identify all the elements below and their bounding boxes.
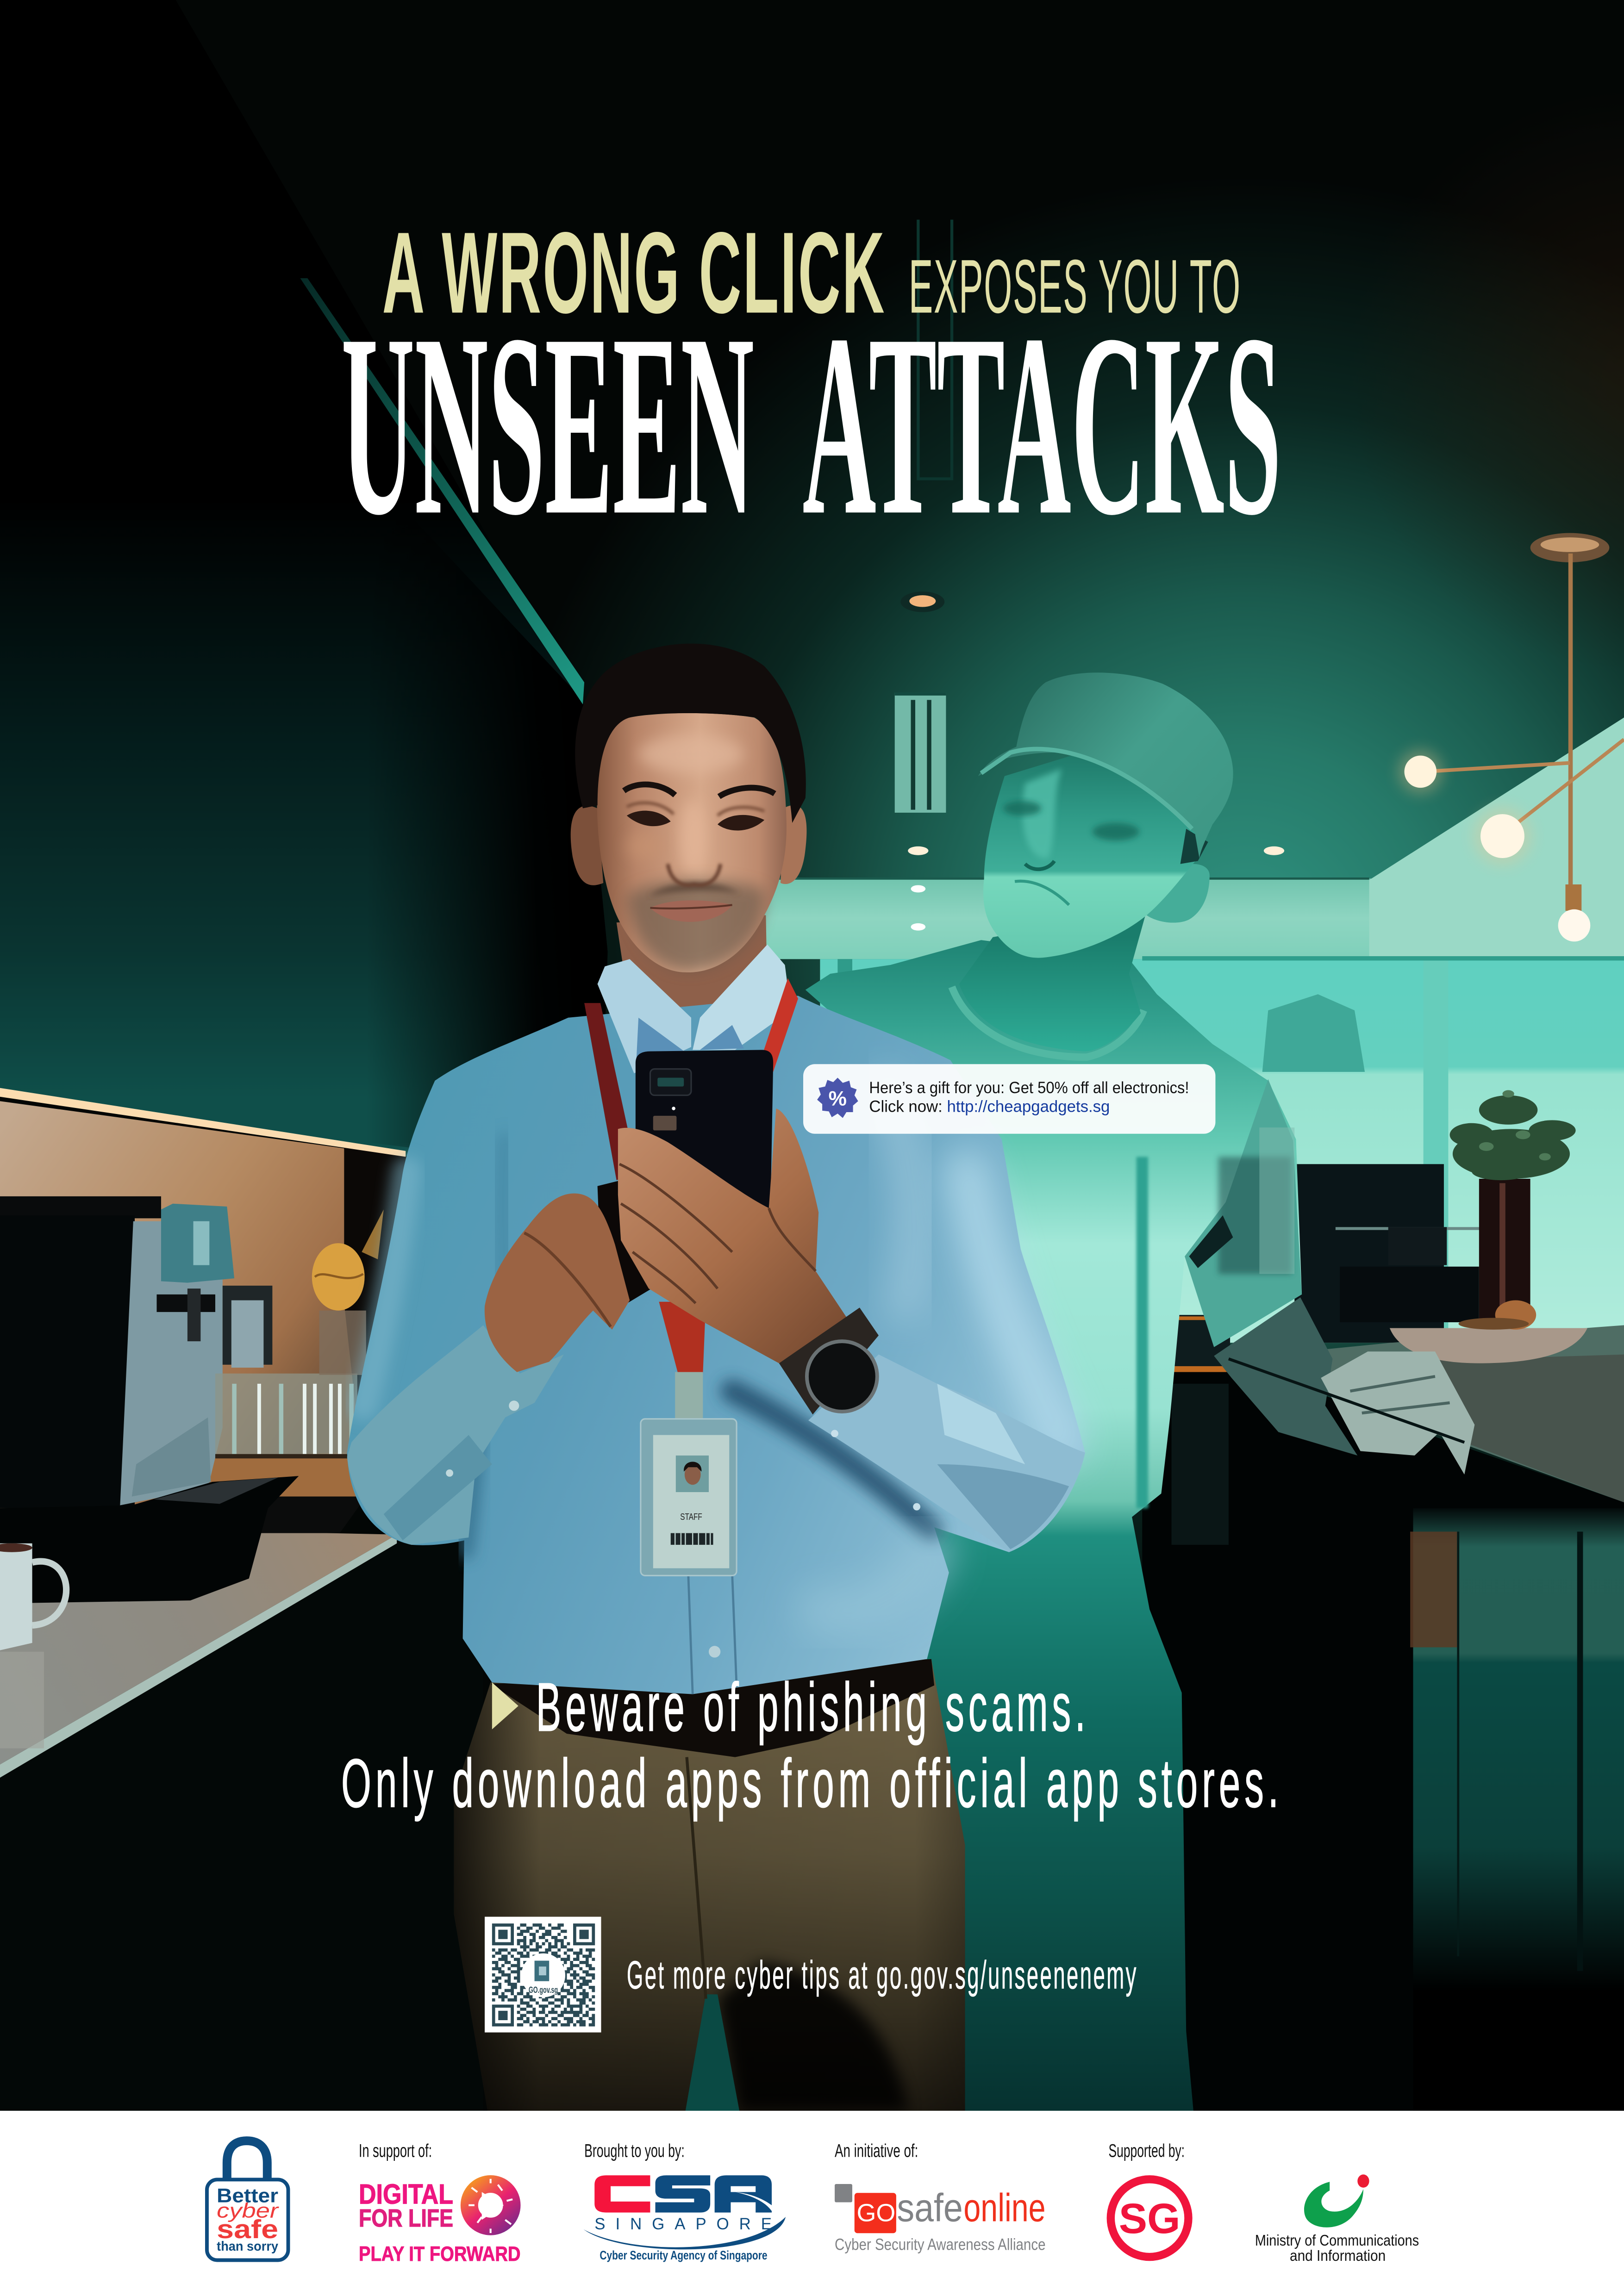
logo: CSA Singapore: Cyber Security Agency of Singapore [600, 2248, 768, 2262]
scene: lit ceiling band [754, 717, 1624, 959]
left hand finger [524, 1233, 611, 1326]
ghost face [983, 754, 1198, 958]
placket and buttons [688, 1574, 737, 1694]
decorative: LED strip under cabinet [0, 1088, 406, 1157]
message line 1: Beware of phishing scams. [536, 1668, 1089, 1746]
badge barcode [671, 1533, 713, 1545]
logo: SG circle: SG [1119, 2195, 1181, 2242]
icon: yellow fruit [312, 1209, 384, 1311]
notification text: Here’s a gift for you: Get 50% off all electronics! [869, 1078, 1189, 1097]
logo: go safe online: Cyber Security Awareness Alliance [835, 2236, 1046, 2253]
logo: ministry swirl [1304, 2174, 1369, 2228]
scene: warm glow top right [1318, 88, 1624, 673]
ministry text [1255, 2232, 1419, 2265]
face highlights [627, 735, 744, 876]
right hand [618, 1108, 851, 1363]
shirt folds and sleeve shading [363, 1091, 1062, 1612]
left sleeve cuff and forearm [347, 1325, 564, 1545]
icon: white mug [0, 1543, 66, 1650]
see-through machine in sleeve [1189, 1127, 1294, 1274]
eye socket shadow [627, 803, 764, 815]
scene: kitchen backsplash [0, 1101, 406, 1611]
moustache [649, 883, 739, 896]
logo: go safe online [835, 2184, 1046, 2253]
wristwatch [779, 1307, 879, 1414]
logo: digital for life [359, 2179, 521, 2265]
scene: black counter base [1142, 1359, 1624, 2116]
scene: back counter with orange edge [1142, 1315, 1230, 1545]
hands dark shadow [598, 1179, 652, 1306]
eyebrows [624, 784, 775, 796]
scene: left base cabinets [0, 1523, 483, 2116]
QR logo [521, 1954, 565, 1997]
ghost cap [978, 672, 1233, 858]
shadow on right leg [718, 1962, 908, 2111]
ghost ear [1147, 864, 1210, 923]
notification link line: Click now: http://cheapgadgets.sg [869, 1098, 1110, 1115]
icon: arrow marker [492, 1682, 518, 1730]
badge photo [676, 1456, 709, 1492]
neck [617, 915, 768, 1062]
icon: percent badge [817, 1078, 858, 1118]
eyes [627, 811, 764, 831]
logo: better cyber safe padlock [207, 2141, 288, 2260]
QR logo: GO.gov.sg [529, 1985, 558, 1995]
decorative: faint vertical ceiling recess [918, 220, 952, 479]
logo: SG circle [1111, 2179, 1188, 2257]
ghost neck [959, 911, 1147, 1052]
scene: wood shelf reflection [205, 1453, 363, 1497]
left ear [571, 806, 603, 885]
shirt [347, 996, 1085, 1694]
face [597, 713, 787, 972]
ghost collar [952, 987, 1143, 1057]
notification card [803, 1064, 1215, 1134]
hair [575, 644, 806, 823]
more tips text: Get more cyber tips at go.gov.sg/unseenenemy [627, 1954, 1138, 1997]
decorative: diagonal ceiling light strip [300, 278, 584, 704]
right hand fingers [619, 1164, 816, 1303]
counter edge through ghost arm [1229, 1359, 1464, 1442]
ghost hand [1321, 1351, 1474, 1475]
logo: better cyber safe padlock: cyber [217, 2200, 280, 2222]
icon: bowl of bread [1390, 1300, 1587, 1363]
logo: go safe online: safe [897, 2186, 963, 2230]
logo: CSA Singapore [584, 2175, 786, 2262]
logo: better cyber safe padlock: safe [217, 2215, 278, 2244]
nose shadow [668, 864, 720, 885]
footer panel [0, 2111, 1624, 2296]
logo: CSA Singapore: SINGAPORE [594, 2215, 772, 2233]
label: brought to you by: Brought to you by: [584, 2140, 685, 2161]
scene: dark wall cabinets [0, 0, 608, 1171]
label: in support of: In support of: [359, 2140, 432, 2161]
right ear [781, 805, 806, 884]
scene: right counter top [1229, 1325, 1624, 1502]
right sleeve cuff and forearm [808, 1355, 1085, 1552]
heading: unseen attacks: UNSEEN [341, 280, 754, 569]
logo: better cyber safe padlock: Better [217, 2185, 278, 2207]
lanyard [584, 978, 798, 1426]
scene: counter brown reflection [1391, 1355, 1624, 1502]
icon: potted plant [1450, 1090, 1576, 1321]
teal gap between legs [685, 1994, 739, 2111]
label: supported by: Supported by: [1109, 2140, 1185, 2161]
ghost forearm [1214, 1297, 1357, 1456]
logo: go safe online: online [963, 2186, 1046, 2230]
belt [491, 1659, 934, 1757]
icon: coffee machine [0, 1196, 299, 1603]
scene: left counter top [0, 1531, 397, 1778]
mouth [650, 900, 732, 922]
scene: right cabinet panels [1410, 1508, 1624, 2116]
ghost cap brim highlight [981, 749, 1192, 829]
trousers [454, 1659, 965, 2111]
smartphone [636, 1050, 773, 1223]
logo: digital for life: DIGITAL [359, 2179, 453, 2210]
ministry text: Ministry of Communications [1255, 2232, 1419, 2249]
left hand [485, 1194, 630, 1372]
icon: percent badge: % [829, 1088, 847, 1110]
stubble [627, 880, 765, 971]
illustration: ghost attacker [806, 672, 1474, 2111]
ghost facial features [1003, 769, 1208, 905]
ghost sleeve [1185, 1079, 1302, 1347]
scene: black plinth [261, 1497, 366, 1533]
ghost shirt vertical stripe [1137, 1157, 1148, 1508]
QR code [485, 1917, 601, 2032]
fly seam [687, 1757, 706, 1999]
scene: ceiling vent [895, 693, 946, 813]
badge label: STAFF [680, 1512, 702, 1522]
collar [598, 945, 791, 1076]
badge face [685, 1464, 701, 1485]
badge hair [684, 1462, 701, 1472]
icon: glasses on shelf [215, 1311, 366, 1458]
logo: digital for life: FOR LIFE [359, 2204, 453, 2232]
scene: dark niche beside backsplash [344, 1146, 406, 1464]
poster: EXPOSES YOU TO [909, 243, 1241, 329]
heading: a wrong click: A WRONG CLICK [382, 208, 886, 337]
label: an initiative of: An initiative of: [835, 2140, 918, 2161]
ghost torso [806, 940, 1302, 2111]
icon: pendant lamp [1399, 533, 1624, 941]
logo: go safe online: GO [856, 2199, 895, 2227]
icon: ceiling lights [900, 591, 1284, 931]
logo: digital for life: PLAY IT FORWARD [359, 2243, 521, 2265]
scene: back room dark cabinet [1294, 1164, 1482, 1343]
ministry text: and Information [1290, 2247, 1386, 2265]
logo: better cyber safe padlock: than sorry [217, 2239, 278, 2254]
scene: windows [820, 956, 1624, 1343]
staff badge [641, 1419, 737, 1575]
illustration: office worker [347, 644, 1085, 2111]
